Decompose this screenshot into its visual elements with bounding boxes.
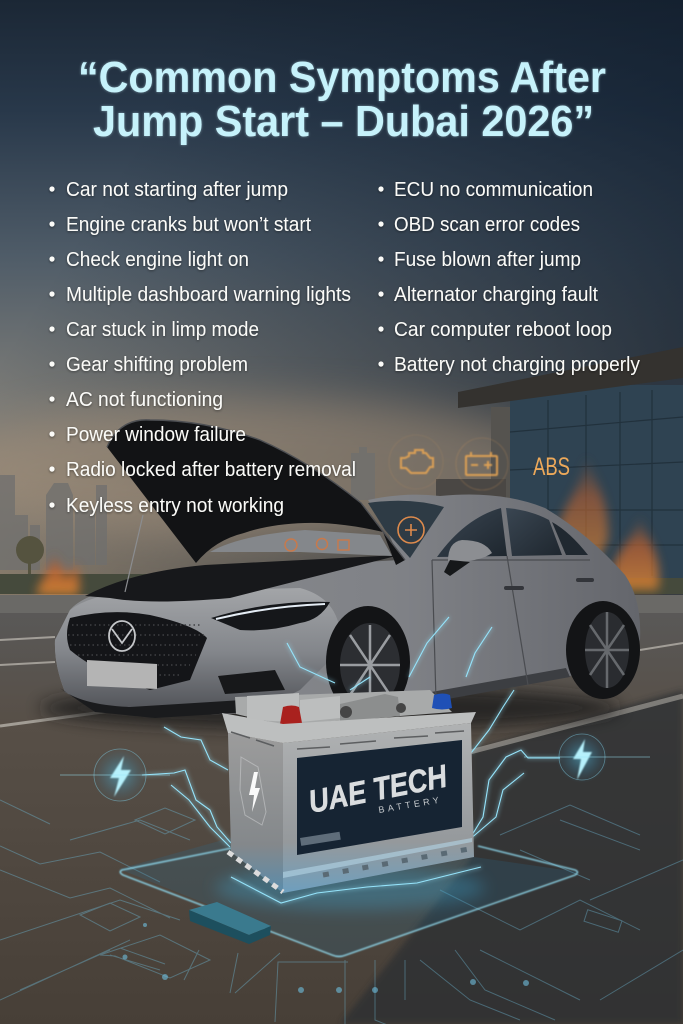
base notches bbox=[323, 849, 469, 875]
battery handle bbox=[340, 694, 406, 722]
battery dark label bbox=[297, 740, 462, 855]
symptom list left: AC not functioning bbox=[66, 389, 223, 411]
background dusk shading bbox=[0, 0, 683, 610]
open hood bbox=[107, 420, 405, 565]
bolt bbox=[110, 756, 131, 797]
symptom list left: Check engine light on bbox=[66, 249, 249, 271]
front bumper intake bbox=[218, 670, 285, 694]
symptom list left: Multiple dashboard warning lights bbox=[66, 284, 351, 306]
label barcode bbox=[300, 832, 341, 846]
flame building bbox=[558, 455, 608, 560]
platform outline bbox=[120, 846, 577, 956]
bolt bbox=[573, 739, 592, 780]
mirror bbox=[444, 540, 492, 576]
title: Jump Start – Dubai 2026” bbox=[93, 97, 594, 146]
ABS icon: ABS bbox=[533, 453, 570, 481]
modern building bbox=[436, 347, 683, 578]
glowing platform bbox=[119, 838, 578, 957]
red terminal bbox=[280, 706, 302, 725]
front splitter bbox=[60, 688, 275, 718]
base feet bbox=[228, 852, 283, 892]
brand name: UAE TECH bbox=[305, 758, 451, 820]
badge ring bbox=[559, 734, 605, 780]
title bbox=[78, 53, 606, 146]
symptom list left: Engine cranks but won’t start bbox=[66, 214, 311, 236]
title: “Common Symptoms After bbox=[78, 53, 606, 102]
background sky bbox=[0, 0, 683, 610]
symptom list right: ECU no communication bbox=[394, 179, 593, 201]
symptom list left: Power window failure bbox=[66, 424, 246, 446]
sidewalk bbox=[0, 595, 683, 613]
bolt badge left bbox=[92, 747, 148, 803]
car logo bbox=[109, 621, 135, 651]
hood prop rod bbox=[125, 515, 143, 592]
fender shading bbox=[55, 588, 341, 716]
door handles bbox=[506, 580, 592, 588]
symptom list right bbox=[378, 179, 640, 376]
symptom list left bbox=[49, 179, 356, 517]
battery cap blocks bbox=[247, 693, 340, 722]
front side window bbox=[437, 508, 507, 557]
circuit traces bbox=[0, 800, 683, 1024]
small chip bbox=[189, 902, 271, 944]
grille bbox=[67, 612, 207, 690]
road markings bbox=[0, 637, 683, 752]
low wall bbox=[436, 479, 506, 499]
brand subtitle: BATTERY bbox=[378, 795, 439, 815]
rear wheel bbox=[566, 601, 640, 699]
headlight bbox=[211, 602, 330, 630]
skyline bbox=[0, 447, 375, 570]
building pillar bbox=[491, 407, 510, 520]
car body bbox=[55, 494, 640, 716]
windshield bbox=[368, 501, 444, 558]
front wheel bbox=[326, 606, 410, 718]
warning icons bbox=[389, 435, 508, 490]
flame left bbox=[36, 550, 80, 595]
door lines bbox=[432, 556, 590, 700]
battery lid top bbox=[235, 690, 452, 725]
lid slots bbox=[231, 731, 464, 749]
windshield battery icon bbox=[398, 517, 424, 543]
blue terminal bbox=[432, 694, 452, 710]
battery front face bbox=[283, 723, 474, 893]
badge glow bbox=[556, 731, 608, 783]
car bbox=[55, 420, 640, 718]
dash warning icons bbox=[285, 538, 349, 551]
bolt badge right bbox=[556, 731, 608, 783]
battery side face bbox=[228, 733, 283, 893]
horizon haze bbox=[0, 400, 580, 540]
grille mesh bbox=[68, 625, 204, 675]
symptom list left: Car not starting after jump bbox=[66, 179, 288, 201]
lower sill bbox=[420, 668, 570, 704]
badge ring bbox=[94, 749, 146, 801]
number plate bbox=[87, 660, 157, 689]
rear side window bbox=[506, 508, 562, 556]
roadside tree bbox=[16, 536, 44, 574]
engine bay bbox=[85, 555, 400, 602]
battery lid rim bbox=[222, 712, 476, 743]
building roof slab bbox=[458, 347, 683, 408]
symptom list right: OBD scan error codes bbox=[394, 214, 580, 236]
glass facade bbox=[510, 385, 683, 578]
ground bbox=[0, 595, 683, 1024]
ground shadow right bbox=[340, 690, 683, 1024]
flame right bbox=[612, 515, 659, 590]
battery bbox=[222, 690, 476, 893]
symptom list right: Battery not charging properly bbox=[394, 354, 640, 376]
circuit nodes bbox=[122, 923, 529, 993]
symptom list right: Fuse blown after jump bbox=[394, 249, 581, 271]
badge glow bbox=[92, 747, 148, 803]
car shadow bbox=[40, 686, 620, 730]
symptom list right: Alternator charging fault bbox=[394, 284, 598, 306]
hedge bbox=[0, 574, 683, 594]
bolt beams bbox=[60, 757, 650, 775]
quarter window bbox=[552, 522, 588, 555]
hood highlight bbox=[107, 420, 405, 560]
symptom list left: Car stuck in limp mode bbox=[66, 319, 259, 341]
lightning arcs bbox=[142, 617, 560, 903]
platform glow bbox=[215, 866, 485, 910]
symptom list left: Keyless entry not working bbox=[66, 495, 284, 517]
base stripe bbox=[283, 838, 472, 878]
windshield lower glass bbox=[210, 530, 392, 556]
symptom list right: Car computer reboot loop bbox=[394, 319, 612, 341]
facade grid bbox=[510, 390, 683, 576]
side bolt emblem bbox=[240, 757, 266, 825]
symptom list left: Gear shifting problem bbox=[66, 354, 248, 376]
symptom list left: Radio locked after battery removal bbox=[66, 459, 356, 481]
